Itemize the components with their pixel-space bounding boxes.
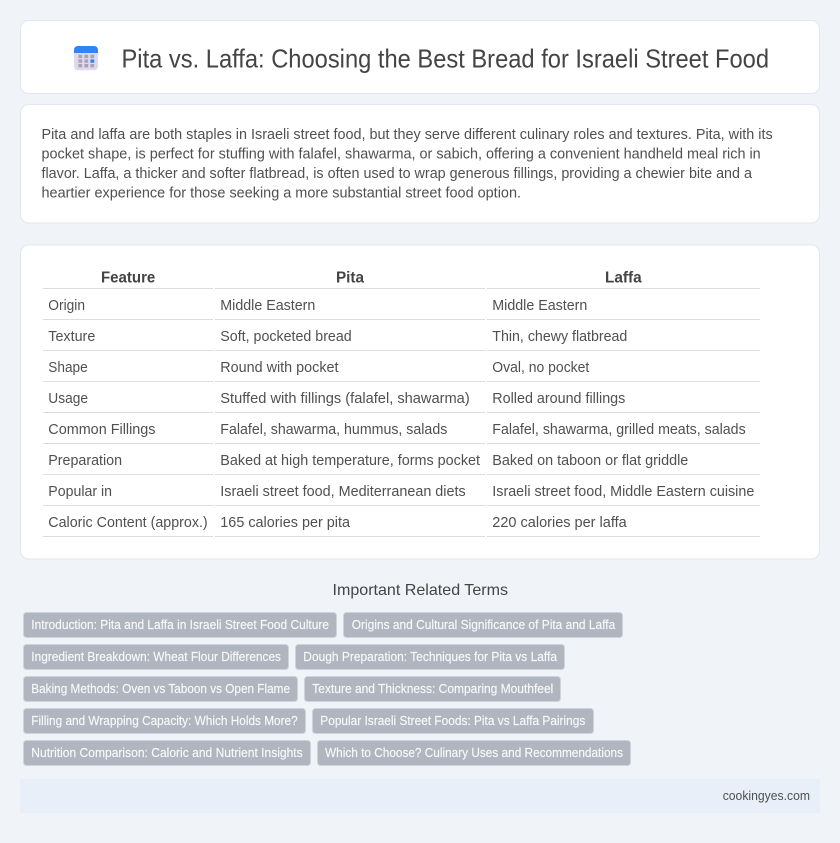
tag: nutrition: Nutrition Comparison: Caloric and Nutrient Insights	[31, 745, 303, 760]
table row: common fillings	[43, 422, 760, 444]
table header row: Pita	[336, 270, 364, 286]
table row: texture	[43, 329, 760, 351]
heading: important related terms: Important Related Terms	[332, 582, 508, 599]
footer	[20, 779, 820, 813]
table row: popular in: Popular in	[48, 484, 112, 500]
tag: which to choose: Which to Choose? Culinary Uses and Recommendations	[325, 745, 623, 760]
table row: usage	[43, 391, 760, 413]
tag: nutrition	[24, 740, 310, 766]
table row: common fillings: Falafel, shawarma, hummus, salads	[220, 422, 447, 438]
panel: comparison table	[20, 245, 820, 559]
tag: ingredients: Ingredient Breakdown: Wheat Flour Differences	[31, 649, 281, 664]
icon: calendar	[74, 46, 98, 70]
panel: introduction	[20, 104, 820, 223]
tag: texture	[304, 676, 560, 702]
tag: popular foods	[312, 708, 594, 734]
table row: common fillings: Falafel, shawarma, grilled meats, salads	[492, 422, 746, 438]
tag: popular foods: Popular Israeli Street Foods: Pita vs Laffa Pairings	[320, 713, 585, 728]
table row: usage: Rolled around fillings	[492, 391, 625, 407]
table header row: Laffa	[605, 270, 642, 286]
table row: origin: Origin	[48, 298, 85, 314]
table row: shape: Round with pocket	[220, 360, 338, 376]
table row: texture: Thin, chewy flatbread	[492, 329, 627, 345]
table row: popular in: Israeli street food, Middle Eastern cuisine	[492, 484, 754, 500]
tag: dough: Dough Preparation: Techniques for Pita vs Laffa	[303, 649, 558, 664]
table row: shape: Oval, no pocket	[492, 360, 589, 376]
table header row: Feature	[101, 270, 156, 286]
panel: related term tags	[24, 612, 630, 766]
tag: ingredients	[24, 644, 288, 670]
panel: header	[20, 20, 820, 94]
tag: which to choose	[318, 740, 630, 766]
footer source text: cookingyes.com	[723, 788, 810, 803]
table row: origin	[43, 298, 760, 320]
table row: common fillings: Common Fillings	[48, 422, 155, 438]
tag: filling: Filling and Wrapping Capacity: Which Holds More?	[31, 713, 298, 728]
table row: popular in: Israeli street food, Mediterranean diets	[220, 484, 466, 500]
text block: introduction paragraph: pocket shape, is perfect for stuffing with falafel, shawarma, or sabich, offering a convenient handheld meal rich in	[42, 146, 761, 162]
table header row	[43, 270, 760, 289]
table row: usage: Stuffed with fillings (falafel, shawarma)	[220, 391, 470, 407]
table row: caloric content: Caloric Content (approx.)	[48, 515, 208, 531]
tag: dough	[296, 644, 564, 670]
text block: introduction paragraph	[42, 127, 773, 201]
table row: preparation: Baked on taboon or flat griddle	[492, 453, 688, 469]
text block: introduction paragraph: heartier experience for those seeking a more substantial street food option.	[42, 185, 521, 201]
title: Pita vs. Laffa: Choosing the Best Bread for Israeli Street Food	[122, 44, 769, 74]
tag: origins: Origins and Cultural Significance of Pita and Laffa	[352, 617, 616, 632]
tag: texture: Texture and Thickness: Comparing Mouthfeel	[312, 681, 553, 696]
table row: texture: Texture	[48, 329, 95, 345]
table row: caloric content: 220 calories per laffa	[492, 515, 628, 531]
table row: caloric content: 165 calories per pita	[220, 515, 351, 531]
tag: filling	[24, 708, 306, 734]
tag: baking	[24, 676, 298, 702]
table row: preparation	[43, 453, 760, 475]
tag: introduction: Introduction: Pita and Laffa in Israeli Street Food Culture	[31, 617, 329, 632]
text block: introduction paragraph: flavor. Laffa, a thicker and softer flatbread, is often used to wrap generous fillings, providing a chewier bite and a	[42, 166, 753, 182]
tag: introduction	[24, 612, 336, 638]
table row: shape	[43, 360, 760, 382]
table row: usage: Usage	[48, 391, 88, 407]
tag: baking: Baking Methods: Oven vs Taboon vs Open Flame	[31, 681, 290, 696]
table row: preparation: Preparation	[48, 453, 122, 469]
table row: preparation: Baked at high temperature, forms pocket	[220, 453, 480, 469]
table row: origin: Middle Eastern	[220, 298, 315, 314]
tag: origins	[344, 612, 622, 638]
text block: introduction paragraph: Pita and laffa are both staples in Israeli street food, but they serve different culinary roles and textures. Pita, with its	[42, 127, 773, 143]
table row: popular in	[43, 484, 760, 506]
table row: shape: Shape	[48, 360, 88, 376]
table row: origin: Middle Eastern	[492, 298, 587, 314]
table row: texture: Soft, pocketed bread	[220, 329, 352, 345]
table row: caloric content	[43, 515, 760, 537]
